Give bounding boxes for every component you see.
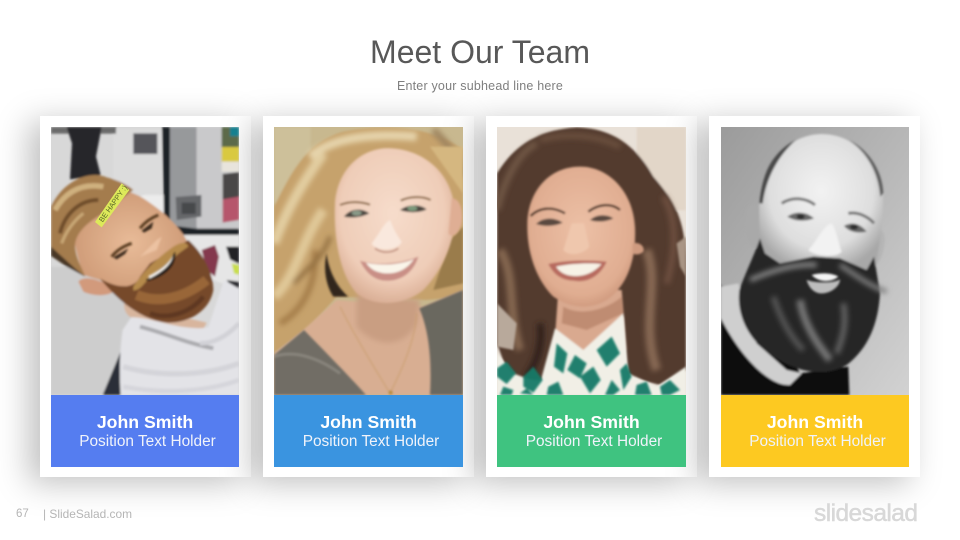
footer: site name: | SlideSalad.com [43,507,132,521]
subheading: Enter your subhead line here [397,79,563,93]
name band [51,395,239,467]
title: Meet Our Team [370,34,590,70]
position: Position Text Holder [79,433,216,450]
name: John Smith [97,412,193,432]
panel: team member 4 [709,116,920,477]
position: Position Text Holder [526,433,662,450]
name: John Smith [543,412,640,432]
photo: laughing bearded man with sticker [51,127,239,395]
name: John Smith [320,412,417,432]
panel: team member 2 [263,116,474,477]
photo: smiling blonde woman [274,127,463,395]
blouse pattern [497,337,680,395]
photo: bald man with dark beard, monochrome [721,127,909,395]
panel: team member 1 [40,116,251,477]
name band [721,395,909,467]
position: Position Text Holder [303,433,439,450]
name: John Smith [767,412,863,432]
logo: slidesalad: slidesalad [814,500,917,527]
sticker: be happy: BE HAPPY :) [97,183,129,224]
panel: team member 3 [486,116,697,477]
footer: page number: 67 [16,508,29,520]
position: Position Text Holder [749,433,886,450]
photo: smiling woman with brown hair [497,127,686,395]
name band [274,395,463,467]
name band [497,395,686,467]
